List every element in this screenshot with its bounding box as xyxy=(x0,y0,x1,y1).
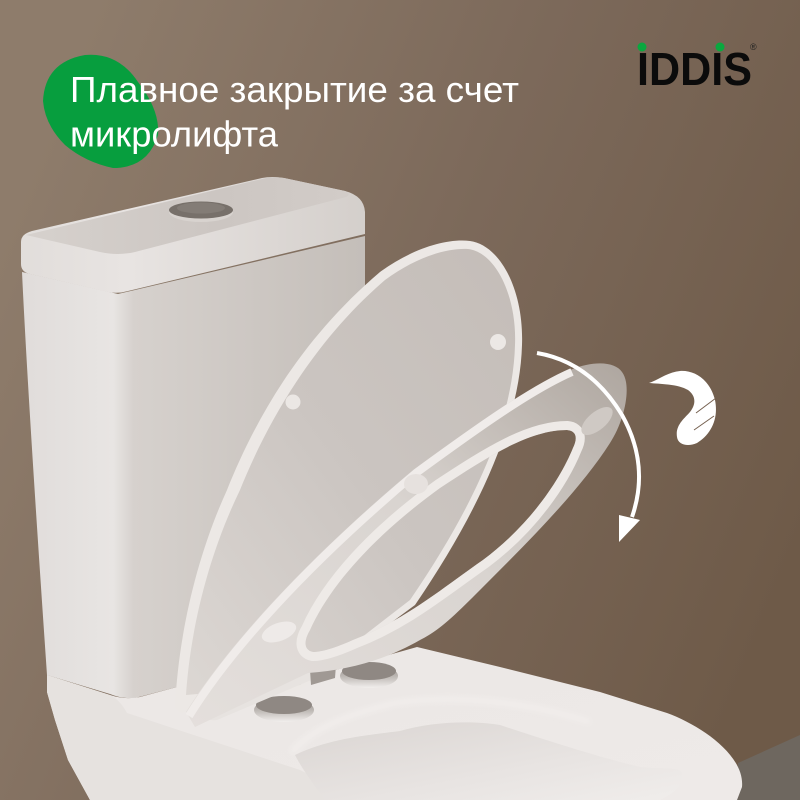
icon: feather xyxy=(649,371,716,445)
logo dots xyxy=(638,42,724,52)
seat ring xyxy=(186,363,627,727)
bowl rim crease xyxy=(292,699,590,752)
ring body xyxy=(186,363,627,727)
hinge bar xyxy=(205,640,420,720)
flush button xyxy=(169,202,233,222)
chrome fixing left xyxy=(254,696,314,722)
registered mark: ® xyxy=(750,42,757,52)
pan front face xyxy=(47,675,360,800)
ring bumper lower xyxy=(259,617,299,647)
pan surface xyxy=(47,647,742,800)
bumper left xyxy=(286,394,300,410)
chrome hinge xyxy=(310,665,336,685)
tank lid top surface xyxy=(26,177,349,254)
toilet tank xyxy=(21,177,365,698)
seat cover xyxy=(175,241,522,713)
tank lid xyxy=(21,177,365,293)
bumper upper right xyxy=(490,334,506,350)
title: Плавное закрытие за счет xyxy=(70,69,519,110)
ring white edge xyxy=(189,372,572,716)
bowl opening xyxy=(295,722,682,800)
ring hinge bumper xyxy=(577,402,617,440)
cover inner face xyxy=(186,249,515,695)
logo: IDDIS xyxy=(637,43,752,95)
title xyxy=(70,69,519,154)
green blob xyxy=(43,55,158,168)
title: микролифта xyxy=(70,114,279,154)
chrome fixing right xyxy=(340,662,398,688)
floor corner xyxy=(735,735,800,800)
ring bumper xyxy=(404,474,428,494)
cover white rim xyxy=(175,241,522,713)
toilet bowl xyxy=(47,647,742,800)
arrow xyxy=(537,353,640,542)
tank body xyxy=(22,236,365,698)
ring inner lip xyxy=(305,430,576,652)
